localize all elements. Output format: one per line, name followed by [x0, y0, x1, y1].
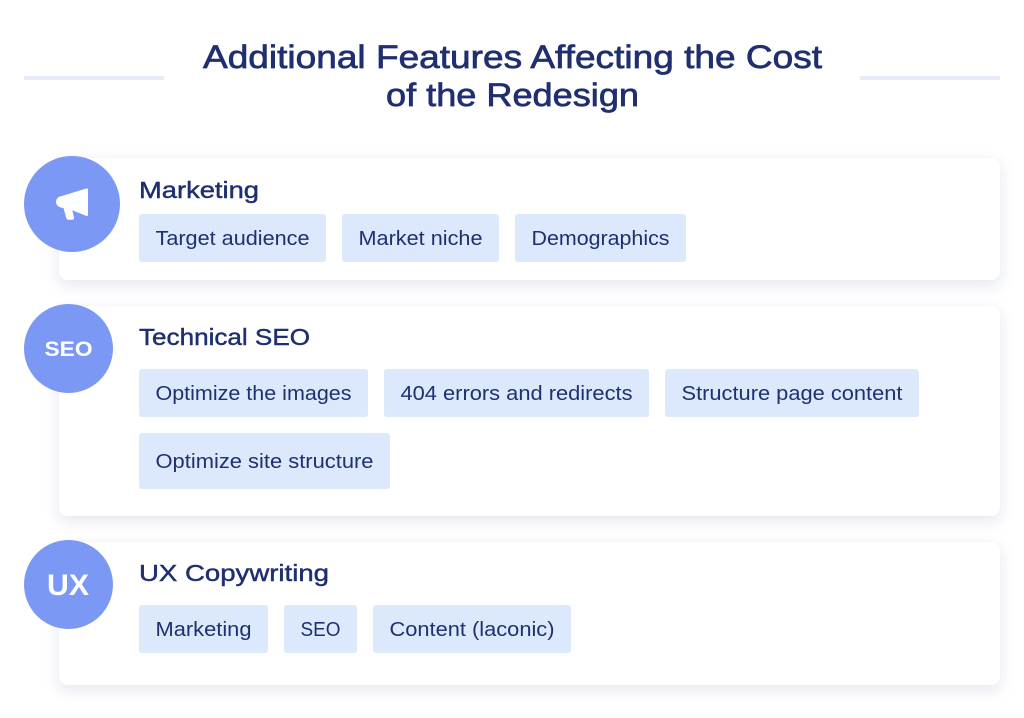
tag: structure page content: Structure page content	[682, 383, 903, 405]
tag: seo	[284, 605, 357, 653]
panel: marketing	[24, 156, 1000, 280]
icon: ux badge: UX	[47, 569, 89, 602]
tag: marketing: Marketing	[156, 619, 252, 641]
panel: technical seo	[24, 304, 1000, 516]
tag: optimize the images: Optimize the images	[156, 383, 352, 405]
heading: marketing: Marketing	[139, 177, 259, 203]
tag: marketing	[139, 605, 268, 653]
tag: demographics	[515, 214, 686, 262]
icon: seo badge	[24, 304, 113, 393]
tag: target audience	[139, 214, 326, 262]
title: of the Redesign	[386, 77, 639, 113]
tag: optimize site structure	[139, 433, 390, 489]
tag: 404 errors and redirects	[384, 369, 649, 417]
icon: megaphone	[24, 156, 120, 252]
tag: optimize the images	[139, 369, 368, 417]
title	[203, 39, 822, 113]
tag: demographics: Demographics	[532, 228, 670, 250]
tag: structure page content	[665, 369, 919, 417]
icon: seo badge: SEO	[44, 337, 92, 361]
heading: technical seo: Technical SEO	[139, 324, 310, 350]
icon: ux badge	[24, 540, 113, 629]
tag: optimize site structure: Optimize site structure	[156, 451, 374, 473]
tag: target audience: Target audience	[156, 228, 310, 250]
title: Additional Features Affecting the Cost	[203, 39, 822, 75]
panel: ux copywriting	[24, 540, 1000, 685]
tag: market niche	[342, 214, 499, 262]
tag: seo: SEO	[300, 619, 340, 641]
heading: ux copywriting: UX Copywriting	[139, 560, 329, 586]
tag: market niche: Market niche	[358, 228, 482, 250]
tag: content (laconic): Content (laconic)	[390, 619, 554, 641]
tag: content (laconic)	[373, 605, 571, 653]
tag: 404 errors and redirects: 404 errors and redirects	[400, 383, 632, 405]
